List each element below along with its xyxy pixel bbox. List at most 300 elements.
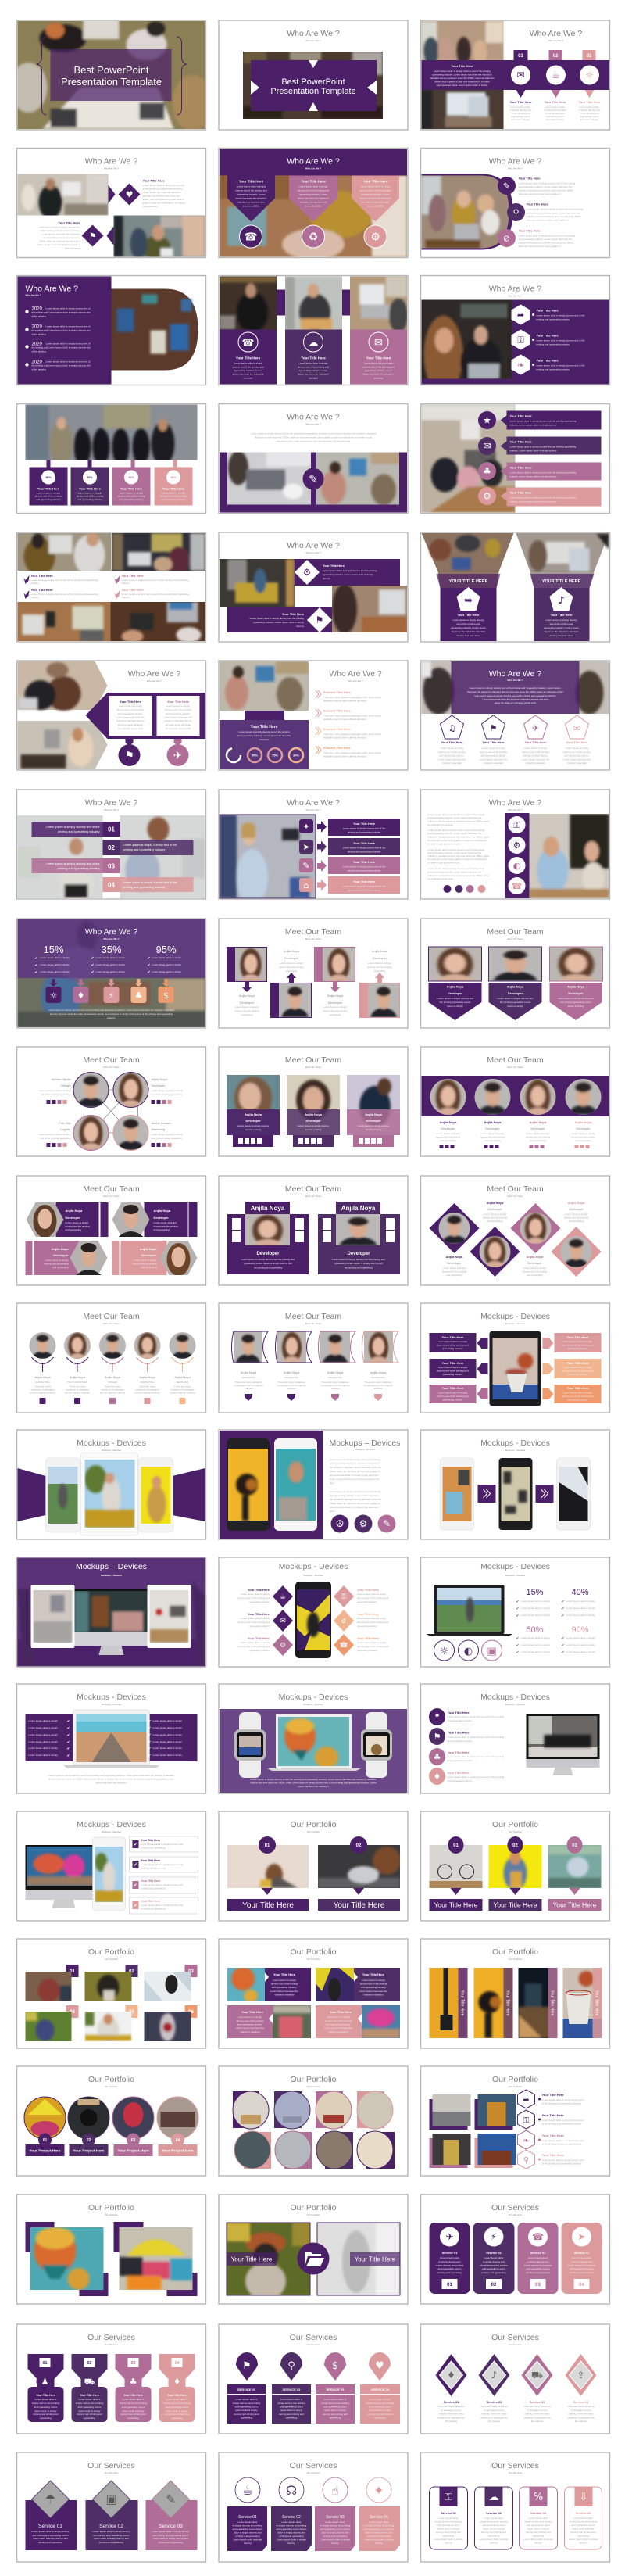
overlay text: Anjila Noya — [245, 1112, 262, 1116]
bios: variations of passages — [136, 1388, 159, 1392]
list text: industry's standard dummy text ever since the 1500s, — [519, 189, 573, 192]
white centre column — [103, 815, 120, 898]
check lists: ✔ — [561, 1607, 565, 1611]
three text blocks: typesetting Lorem — [512, 115, 530, 118]
bar text: printing and typesetting industry — [123, 848, 165, 851]
element list: Element Title Here — [323, 708, 352, 713]
panel text: typesetting — [330, 2416, 341, 2419]
box text: dummy text of the printing and — [562, 1343, 594, 1346]
photo: photographer — [227, 2223, 309, 2295]
number tabs: 05 — [129, 2010, 134, 2015]
funnel captions: YOUR TITLE HERE — [542, 579, 581, 584]
number boxes — [442, 2279, 589, 2289]
photo grid — [25, 1972, 191, 2044]
check lists: Lorem Ipsum dolor is simply — [566, 1650, 595, 1653]
panel text: since the 1500s. — [367, 205, 384, 208]
bios: and typesetting — [141, 1266, 157, 1269]
heading: Our Portfolio — [88, 2203, 134, 2212]
name texts — [234, 949, 392, 1016]
card text: dummy text printing and — [436, 2531, 461, 2534]
icon circles: ⚿ — [513, 820, 520, 830]
slide 50: eight round photos on squares: Our Portfolio — [307, 2085, 320, 2088]
number tabs: 03 — [587, 54, 592, 59]
right text: dummy text of the printing and — [357, 1645, 389, 1648]
slide 52: two photos with purple corners — [17, 2194, 206, 2304]
number boxes — [103, 822, 120, 892]
panel text: industry's standard — [240, 2030, 260, 2033]
number circles: 01 — [43, 2138, 47, 2143]
card text: and typesetting industry — [161, 498, 186, 501]
service bars: SERVICE 01 — [238, 2388, 256, 2391]
hexagon icons: ⚲ — [523, 2156, 529, 2165]
card text — [436, 2251, 596, 2274]
check list — [23, 574, 189, 599]
purple header band — [220, 149, 407, 175]
four text columns: and typesetting industry. — [439, 754, 465, 757]
four text columns: Lorem Ipsum has been the — [563, 758, 591, 761]
portrait 1 — [227, 947, 267, 982]
icon tiles — [45, 987, 173, 1003]
caption text: Ipsum is simply — [568, 1005, 584, 1008]
pentagon outline icons — [441, 715, 589, 739]
panel text: Lorem Ipsum dolor is — [324, 2398, 347, 2401]
icon squares — [299, 819, 313, 892]
slide 27: purple band with four portraits: Meet Our Team — [507, 1066, 523, 1069]
overlay text: Lorem Ipsum has been the industry's standard dummy text ever — [482, 697, 548, 700]
bios: MARKETING — [241, 1376, 256, 1379]
number tabs — [66, 1965, 197, 2018]
slide 13: four photos with check list — [17, 532, 206, 643]
check lists: Lorem Ipsum dolor is simply — [566, 1600, 595, 1603]
bios: and typesetting — [568, 1220, 584, 1223]
overlays: Your Title Here — [355, 2256, 396, 2263]
list text: Lorem Ipsum dolor is simply dummy text of the printing — [519, 181, 576, 185]
bios: Anjila Noya — [370, 1370, 387, 1374]
overlays — [227, 2252, 400, 2266]
bios: Anjila Noya — [527, 1255, 544, 1259]
purple corners — [25, 2222, 197, 2296]
band text — [430, 64, 495, 87]
slide 3: who are we with three steps: Who Are We ? — [548, 39, 563, 42]
icon circles: ♦ — [434, 1772, 441, 1782]
photo: businessman — [220, 277, 277, 330]
check items: Lorem Ipsum dolor is simply — [95, 963, 125, 966]
card text: Ipsum dolor is simply — [527, 2527, 550, 2530]
bar text — [45, 826, 177, 889]
left text: dummy text of the printing and — [238, 1621, 270, 1624]
icon circles: ☎ — [532, 2231, 544, 2242]
panel text bottom — [250, 612, 305, 628]
bios: and typesetting — [487, 1220, 503, 1223]
number circles: 01 — [453, 1843, 459, 1848]
check lists: Lorem Ipsum dolor is simply — [520, 1636, 550, 1639]
bios: dummy text the printing — [564, 1216, 588, 1220]
bios: dummy text the printing — [153, 1224, 178, 1227]
list text: Lorem Ipsum dolor is simply dummy text — [542, 2119, 584, 2122]
card text: Your Title Here — [353, 822, 376, 826]
slide 54: four rounded service cards — [420, 2194, 609, 2304]
card text: Ipsum dolor is simply dummy text — [94, 2537, 129, 2540]
card text: Service 01 — [38, 2524, 62, 2529]
check lists: ✔ — [561, 1650, 565, 1655]
panel lists: Lorem Ipsum dolor is simply — [28, 1726, 58, 1729]
D-shaped photo — [111, 289, 198, 371]
element list: available majority have suffered alteration — [323, 755, 367, 758]
column text: Lorem Ipsum dolor is simply — [234, 361, 263, 364]
card text: and typesetting Lorem Ipsum — [277, 2528, 307, 2531]
card text: simply dummy text printing — [524, 2520, 552, 2524]
right boxes — [542, 1333, 602, 1403]
slide 48: four vertical strips — [420, 1939, 609, 2048]
card text: industry's standard dummy — [164, 719, 192, 722]
panel text — [235, 180, 391, 208]
name texts: Lorem Ipsum is simply — [280, 962, 303, 965]
text block top — [142, 178, 185, 208]
heading: Mockups - Devices — [77, 1693, 146, 1702]
photo 2 — [489, 1845, 542, 1888]
column text: dummy text ever since — [549, 634, 573, 637]
service text: the majority — [445, 2420, 458, 2423]
icons: ✎ — [383, 1518, 391, 1529]
box text: typesetting industry — [568, 1398, 588, 1401]
slide 19: numbered bars over photo: Who Are We ? — [104, 808, 119, 811]
card text: Your Title Here — [79, 486, 102, 491]
percent circles: 90% — [170, 476, 177, 479]
name texts: Developer — [284, 956, 299, 960]
card text: Lorem Ipsum dolor — [484, 2256, 504, 2259]
bios: Anjila Noya — [530, 1120, 547, 1124]
bios: and typesetting — [530, 1139, 546, 1142]
icon circles — [440, 2227, 591, 2247]
card text: Lorem Ipsum is simply — [120, 491, 143, 494]
left bios: text of the printing typesetting — [40, 1093, 71, 1096]
list text: and typesetting industry. Lorem Ipsum has been the — [527, 211, 580, 214]
list text: Your Title Here — [447, 1771, 470, 1775]
percentages: 50% — [526, 1625, 544, 1635]
slide 9: photo with hexagon list: Who Are We ? — [508, 294, 523, 297]
column text: typesetting industry. Lorem — [365, 369, 393, 372]
card text: Your Title Here — [141, 1879, 160, 1883]
name texts: dummy text the printing — [279, 966, 304, 969]
card text: Service 01 — [442, 2251, 458, 2255]
right diamonds: ☎ — [339, 1642, 348, 1650]
hexagon portraits — [27, 1202, 197, 1276]
card text: dummy text of the printing — [77, 494, 104, 497]
panel text: typesetting — [374, 2416, 386, 2419]
four text columns: dummy text of the printing — [480, 751, 507, 754]
card text: simply dummy text printing — [524, 2264, 552, 2267]
portraits — [231, 1331, 398, 1363]
bios: Developer — [66, 1216, 80, 1220]
cards — [430, 2223, 602, 2294]
service bars: SERVICE 02 — [282, 2388, 301, 2391]
slide 49: four round project photos — [17, 2066, 206, 2176]
panel text: and typesetting industry. — [361, 1986, 386, 1989]
outlined icons: ▣ — [487, 1646, 497, 1657]
card text: Lorem Ipsum dolor — [238, 2520, 258, 2524]
title bars — [430, 1899, 602, 1911]
slide 54: four rounded service cards: Our Services — [509, 2213, 523, 2216]
diamonds — [31, 2481, 189, 2518]
text block bottom: Lorem Ipsum dolor is simply dummy text — [38, 225, 80, 228]
column text: Ipsum has been the industry's — [233, 372, 264, 375]
left diamonds — [273, 1585, 293, 1656]
bios: dummy text the printing — [483, 1216, 507, 1220]
timeline entries: the printing and Lorem Ipsum dolor is simply dummy text — [31, 328, 91, 331]
service text: majority There are many — [481, 2413, 507, 2416]
slide 43: monitor, phone and check cards: Mockups - Devices — [102, 1830, 122, 1833]
caption: Ipsum has been the industry's — [96, 1781, 127, 1784]
icon circles: ✎ — [503, 181, 510, 191]
service text: Ipsum dolor is simply — [166, 2409, 188, 2413]
bios: Anjila Noya — [327, 1370, 344, 1374]
icon diamond top: ♥ — [126, 189, 133, 200]
card text: Lorem Ipsum is simply — [78, 491, 102, 494]
heading: Who Are We ? — [489, 285, 541, 294]
panel lists: ✔ — [66, 1726, 70, 1731]
name texts: Developer — [328, 1001, 343, 1005]
slide 28: hexagon portrait cards — [17, 1176, 206, 1285]
left text: typesetting industry — [249, 1625, 270, 1628]
slide 23: team grid with arrows: Meet Our Team — [305, 937, 322, 940]
bar text: Your Title Here — [509, 491, 532, 494]
list text: of the printing and typesetting industry — [542, 2142, 582, 2145]
slide 10: team photo with four cards — [17, 403, 206, 513]
check items: ✔ — [147, 970, 151, 975]
service bars: SERVICE 04 — [371, 2388, 390, 2391]
title bars: Your Title Here — [553, 1901, 597, 1909]
panel lists: ✔ — [148, 1719, 152, 1724]
card text: and typesetting industry — [77, 498, 102, 501]
timeline entries: the printing and Lorem Ipsum dolor is simply dummy text — [31, 364, 91, 367]
bar text: industry. Lorem Ipsum dolor is simply dummy — [509, 424, 557, 427]
icons: ⛟ — [531, 2370, 543, 2381]
column text: Lorem Ipsum is simply dummy — [452, 618, 484, 622]
list text: Your Title Here — [536, 333, 559, 338]
card text: Lorem Ipsum dolor is simple — [479, 2538, 509, 2541]
caption: dummy text ever since the when an unknown printer. Lorem Ipsum is simply dummy text of the printing and typesetting — [50, 1012, 173, 1016]
card text: Lorem Ipsum dolor is simply dummy — [92, 2530, 130, 2533]
stat panel text: and typesetting industry. Lorem Ipsum has been the — [238, 734, 291, 737]
bios: Lorem Ipsum is simply — [572, 1132, 595, 1135]
list text: Your Title Here — [536, 358, 559, 363]
panel text: dummy text printing and — [323, 2413, 348, 2416]
bios: There are many variations — [278, 1381, 305, 1384]
text block top: Lorem Ipsum has been the industry's — [142, 191, 181, 194]
card text: Lorem Ipsum is simply — [37, 491, 60, 494]
heading: Our Services — [491, 2461, 539, 2470]
panel text: and typesetting Lorem — [369, 2405, 392, 2408]
panel text: dummy text of the printing and — [359, 189, 391, 192]
list text: Your Title Here — [447, 1731, 470, 1734]
box text: dummy text of the printing and — [437, 1395, 469, 1398]
title bars: Your Project Here — [117, 2148, 149, 2153]
text block top: type specimen — [142, 205, 158, 208]
card text: Service 01 — [238, 2515, 257, 2520]
service text: There are many variations — [567, 2405, 595, 2408]
paragraphs: the industry's standard dummy text ever since the — [330, 1498, 381, 1501]
card text: is simply dummy text — [483, 2260, 505, 2263]
heading: Who Are We ? — [489, 156, 541, 166]
bios: dummy text the printing — [480, 1135, 505, 1138]
slide 50: eight round photos on squares — [219, 2066, 408, 2176]
overlay text: Anjila Noya — [365, 1112, 383, 1116]
slide 57: double diamond services: Our Services — [509, 2343, 523, 2346]
stat panel text — [238, 725, 291, 741]
caption: dummy text ever since the 1500s, when Lorem Ipsum is simply dummy text of the printing and typesetting industry. Lorem — [48, 1778, 175, 1781]
panel text: Ipsum dolor is simply — [235, 2409, 258, 2412]
bios: DESIGNER — [177, 1381, 189, 1384]
panel text: since the 1500s. — [305, 205, 322, 208]
caption: dummy text ever since the 1500s, when Lorem Ipsum is simply dummy text of the printing and typesetting industry. Lorem — [250, 1781, 377, 1784]
box text: typesetting industry — [443, 1373, 463, 1376]
icons — [241, 338, 383, 349]
box text: Lorem Ipsum dolor is simply — [563, 1366, 593, 1369]
heading: Mockups - Devices — [480, 1312, 550, 1321]
white phone — [274, 1438, 317, 1531]
caption text: the printing typesetting Lorem — [440, 1001, 471, 1004]
left funnel photo — [422, 533, 514, 588]
band text: type specimen book. Lorem Ipsum dolor is simply — [437, 84, 488, 87]
bios: Anjila Noya — [34, 1375, 51, 1379]
service text: and typesetting Lorem — [78, 2406, 102, 2409]
check list: Lorem Ipsum is simply dummy text of the printing and typesetting — [122, 579, 189, 582]
icon circles: ⚙ — [483, 491, 491, 502]
list text — [447, 1711, 505, 1782]
box text: typesetting industry — [568, 1347, 588, 1350]
slide 46: six numbered photos: Our Portfolio — [105, 1958, 118, 1961]
bios: Lorem Ipsum is simply — [523, 1267, 547, 1270]
slide 20: portrait with four title cards — [219, 790, 408, 905]
card text: Your Title Here — [141, 1900, 160, 1903]
outlined icons — [434, 1640, 502, 1661]
timeline entries: of the printing — [31, 350, 46, 353]
panel text: dummy text of the printing and — [298, 189, 330, 192]
slide 44: portfolio two photos: Our Portfolio — [307, 1830, 320, 1833]
pointers — [500, 416, 506, 425]
paragraphs: an unknown printer took a galley of type and scrambled it — [428, 839, 488, 842]
panel text: since the 1500s. — [243, 205, 260, 208]
list text: Your Title Here — [542, 2093, 564, 2097]
list text: and typesetting industry. Lorem Ipsum has been the — [519, 185, 573, 188]
left bios: Logiefe — [60, 1127, 71, 1131]
white hexagon icons — [511, 305, 530, 375]
paragraphs: Lorem Ipsum is simply dummy text of the printing — [330, 1458, 381, 1461]
vertical captions: Your Title Here — [505, 1990, 509, 2016]
slide 29: two tabbed team cards — [219, 1176, 408, 1285]
panel text: dummy text of the printing and — [235, 189, 267, 192]
three text blocks: is simply dummy text — [510, 109, 532, 112]
number circles — [259, 1836, 367, 1854]
card text: printing and typesetting — [141, 1847, 166, 1850]
overlay text: text the printing — [245, 1128, 262, 1131]
left bracket — [38, 37, 47, 115]
panel lists: Lorem Ipsum dolor is simply — [153, 1747, 182, 1750]
slide 51: four photos with hexagon list — [420, 2066, 609, 2176]
card text: printing and typesetting industry — [348, 830, 381, 833]
column text: dummy text of the printing and — [232, 366, 264, 369]
slide 53: two framed photos with folder icon: Our Portfolio — [307, 2213, 320, 2216]
map pins: $ — [332, 2360, 338, 2372]
paragraphs: to make a type specimen book — [428, 843, 460, 846]
number circles: 02 — [87, 2138, 91, 2143]
card text: printing and typesetting — [481, 2271, 506, 2274]
slide 11: intro text above two photos: Who Are We ? — [305, 422, 321, 425]
caption text: the printing typesetting Lorem — [500, 1001, 531, 1004]
paragraphs: an unknown printer took — [428, 877, 453, 880]
icon circles: ♦ — [173, 2377, 180, 2387]
icon ellipses — [238, 332, 388, 352]
stat panel text: Lorem Ipsum is simply dummy text of the printing — [238, 730, 290, 733]
card text: and typesetting Lorem — [482, 2267, 505, 2270]
slide 24: three portraits with pointed captions: Meet Our Team — [507, 937, 523, 940]
four text columns: industry's standard — [442, 761, 462, 765]
portraits — [430, 1079, 602, 1116]
faint figure behind overlay — [58, 921, 98, 981]
panel text bottom: typesetting industry. Lorem Ipsum dolor is simply — [253, 621, 304, 624]
slide 7: timeline panel with rounded photo — [17, 275, 206, 385]
three text blocks: is simply dummy text — [545, 109, 566, 112]
slide 52: two photos with purple corners: Our Portfolio — [105, 2213, 118, 2216]
card text: Lorem Ipsum dolor is simply dummy text — [141, 1883, 183, 1886]
card text: Service 04 — [576, 2511, 591, 2515]
slide 4: two photos and diamonds: Who Are We ? — [104, 167, 119, 170]
card text: Service 01 — [574, 2251, 590, 2255]
connector strip — [245, 711, 284, 720]
number tabs: 02 — [553, 54, 559, 59]
slide 12: meeting room with four bars — [420, 403, 609, 513]
check items: ✔ — [147, 963, 151, 968]
right text: typesetting industry — [357, 1625, 377, 1628]
card text: is simply dummy text — [527, 2260, 549, 2263]
outlined icons: ☼ — [440, 1646, 448, 1657]
slide 38: phone with six diamonds — [219, 1557, 408, 1667]
card text: Lorem Ipsum dolor is simply dummy — [152, 2530, 190, 2533]
panel text: Your Title Here — [362, 1972, 385, 1976]
card text: dummy text of the printing — [165, 708, 192, 711]
timeline entries: of the printing — [31, 314, 46, 317]
caption: industry. — [107, 1016, 116, 1019]
paragraphs: industry's standard dummy text ever since the 1500s, when — [428, 835, 490, 838]
left text: Lorem Ipsum dolor is simply — [241, 1617, 270, 1620]
slide 55: hourglass service columns: Our Services — [105, 2343, 119, 2346]
box text — [437, 1335, 594, 1401]
overlay text: Lorem Ipsum is simply dummy — [238, 1124, 270, 1127]
name texts: typesetting — [330, 1013, 341, 1016]
bios: Developer — [53, 1253, 69, 1257]
paragraphs: book. It has survived not only five centuries, but — [330, 1478, 379, 1481]
band text: Lorem Ipsum dolor is simply dummy text of the printing — [434, 70, 491, 73]
heading: Who Are We ? — [128, 669, 180, 679]
card text: dolor is simply dummy text — [321, 2531, 349, 2535]
four text columns: industry's standard — [567, 761, 587, 765]
paragraphs: and typesetting industry. Lorem Ipsum has been the — [428, 871, 482, 874]
icon diamond bottom — [81, 225, 114, 247]
slide 40: laptop with check panels — [17, 1684, 206, 1793]
left text: typesetting industry — [249, 1600, 270, 1603]
bios: suffered — [331, 1387, 340, 1390]
list text: printing and typesetting industry. — [536, 367, 570, 371]
diamond icon bottom: ⚑ — [316, 614, 323, 625]
check lists: Lorem Ipsum dolor is simply — [520, 1607, 550, 1610]
band text: standard dummy text ever since the 1500s, when an unknown — [430, 77, 495, 80]
check items — [34, 956, 181, 975]
heading: Meet Our Team — [83, 1184, 140, 1194]
map pins — [236, 2352, 391, 2381]
column text: Lorem Ipsum dolor is simply — [298, 361, 328, 364]
pentagon glyphs: ⚑ — [490, 723, 497, 733]
panel text: Lorem Ipsum has been the — [270, 1990, 298, 1993]
